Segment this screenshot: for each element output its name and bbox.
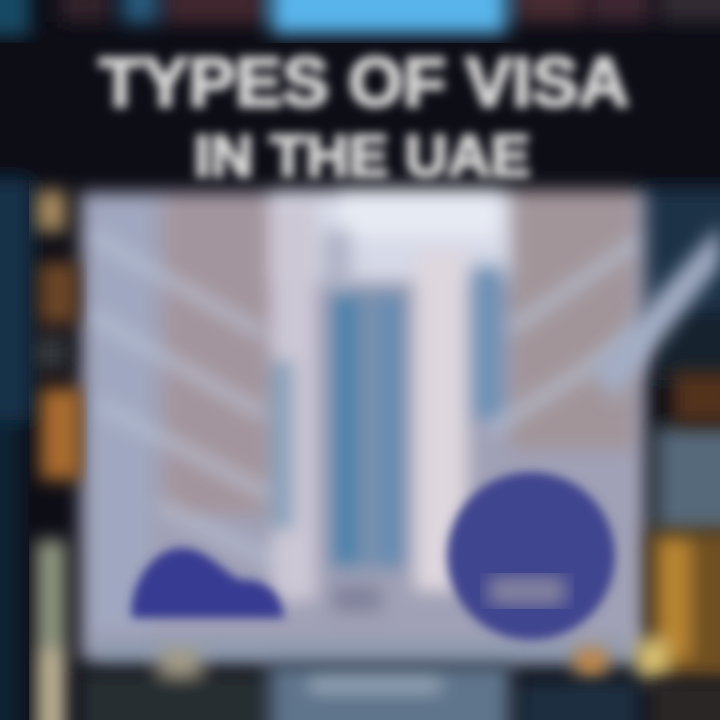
title: IN THE UAE bbox=[194, 124, 530, 189]
central tower bbox=[322, 230, 406, 613]
sky strip at the top bbox=[0, 0, 720, 36]
left column: warm lights bbox=[34, 190, 82, 720]
panel: building photo bbox=[80, 188, 646, 666]
diagonal light bands bbox=[90, 235, 640, 565]
icon: blue crown badge bbox=[447, 472, 615, 640]
right column: warm interior bbox=[575, 372, 720, 680]
title bbox=[99, 43, 629, 189]
right side sweep bbox=[590, 225, 720, 400]
bottom strip bbox=[80, 648, 720, 720]
icon: blue cloud shape bbox=[132, 548, 284, 618]
title: TYPES OF VISA bbox=[99, 43, 629, 121]
